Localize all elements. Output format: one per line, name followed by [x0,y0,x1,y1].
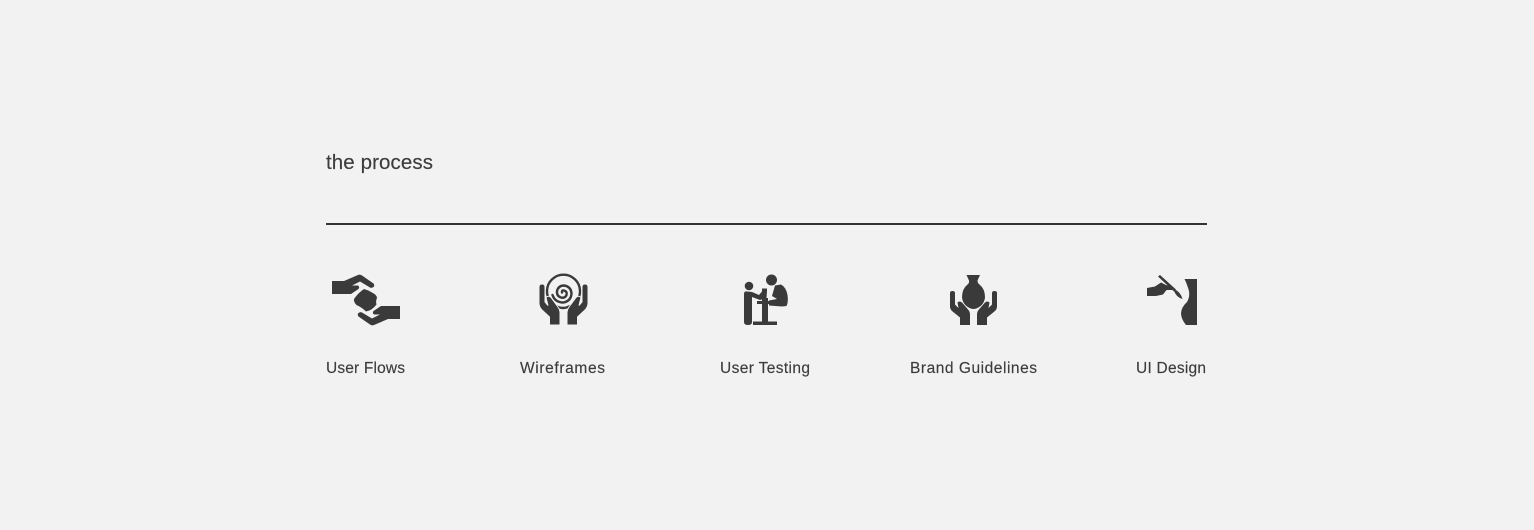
label: Brand Guidelines: Brand Guidelines [910,360,1037,377]
icon: hands holding vase [950,275,997,325]
icon: two hands passing clay [332,275,400,325]
step: User Testing [720,274,810,377]
step: Wireframes [520,275,605,377]
label: User Flows: User Flows [326,360,405,377]
step: UI Design [1136,275,1206,377]
step: Brand Guidelines [910,275,1037,377]
label: UI Design: UI Design [1136,360,1206,377]
divider line [326,223,1207,225]
icon: hands holding spiral [539,275,588,325]
icon: hand painting vase [1147,275,1197,325]
label: Wireframes: Wireframes [520,360,605,377]
icon: potter at wheel with student [744,274,788,325]
step: User Flows [326,275,405,377]
label: User Testing: User Testing [720,360,810,377]
heading: the process: the process [326,151,433,174]
